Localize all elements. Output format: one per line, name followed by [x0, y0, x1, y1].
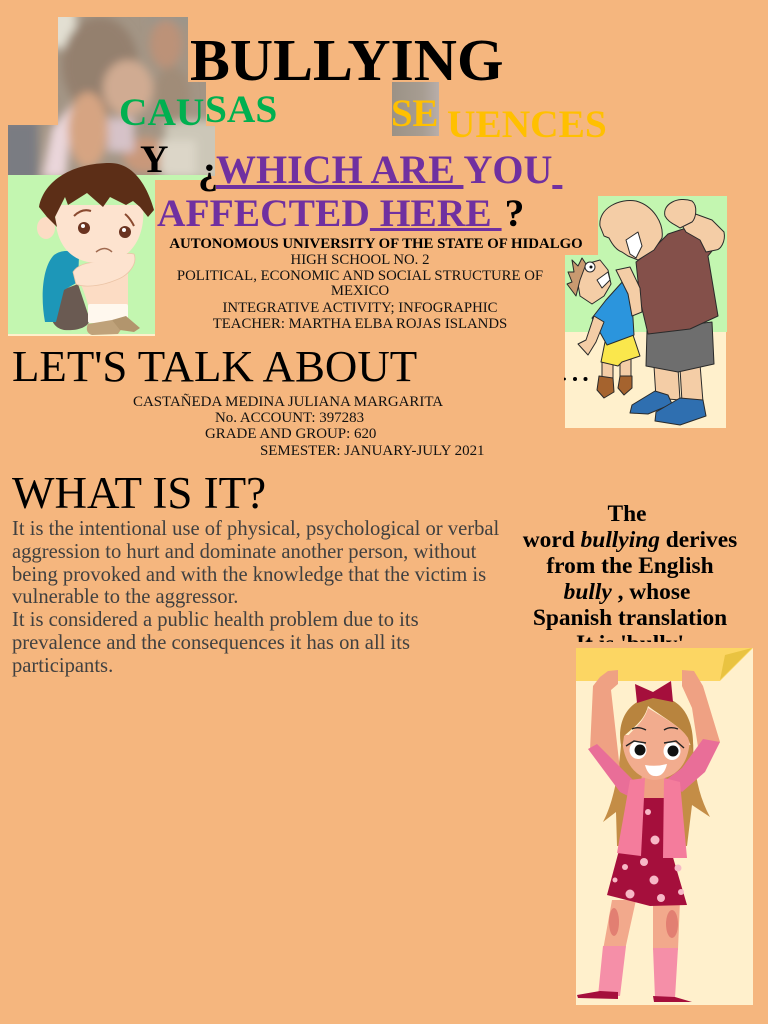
boy shorts: [52, 284, 90, 330]
bully raised arm: [680, 212, 724, 252]
text block: word origin: [522, 502, 737, 642]
text block: student information: SEMESTER: JANUARY-JULY 2021: [260, 442, 485, 458]
text block: definition of bullying: aggression to hurt and dominate another person, without: [12, 540, 476, 562]
text block: definition of bullying: vulnerable to the aggressor.: [12, 586, 238, 608]
heading: consequences: UENCES: [447, 102, 607, 146]
connector word: Y: Y: [140, 136, 168, 180]
text block: school information: [169, 236, 583, 332]
text block: student information: No. ACCOUNT: 397283: [215, 410, 364, 426]
image: smiling girl holding up a yellow banner: [576, 648, 753, 1005]
small boy shorts: [601, 335, 640, 366]
heading: which are you affected here: [157, 147, 562, 234]
text block: definition of bullying: prevalence and the consequences it has on all its: [12, 632, 410, 654]
small boy arm: [578, 316, 604, 355]
heading: causes: [119, 86, 277, 134]
text block: definition of bullying: It is considered a public health problem due to its: [12, 609, 419, 631]
yellow banner: [576, 648, 753, 681]
bully fist: [665, 199, 696, 228]
heading: which are you affected here: ¿: [198, 147, 218, 192]
text block: school information: POLITICAL, ECONOMIC AND SOCIAL STRUCTURE OF: [177, 268, 543, 284]
bully head: [600, 200, 662, 260]
bully shorts: [646, 322, 714, 372]
heading: which are you affected here: AFFECTED HERE ?: [157, 190, 524, 234]
small boy spiky hair: [567, 258, 586, 296]
girl bow: [635, 681, 673, 703]
bully shirt: [636, 224, 718, 334]
text block: definition of bullying: It is the intentional use of physical, psychological or verbal: [12, 518, 499, 540]
heading: causes: CAU: [119, 90, 204, 134]
girl sleeves: [588, 744, 633, 798]
girl neck: [640, 772, 668, 798]
heading: what is it: WHAT IS IT?: [12, 468, 266, 518]
bully legs: [654, 364, 703, 402]
text block: school information: TEACHER: MARTHA ELBA ROJAS ISLANDS: [213, 316, 507, 332]
boy hair: [39, 163, 154, 227]
girl hair top: [620, 697, 693, 752]
small boy shirt: [592, 280, 634, 345]
bully grabbing arm: [616, 267, 642, 316]
title: BULLYING: [190, 26, 504, 92]
text block: student information: CASTAÑEDA MEDINA JULIANA MARGARITA: [133, 394, 443, 410]
girl dress: [607, 785, 687, 906]
boy legs: [80, 262, 128, 314]
text block: word origin: from the English: [546, 552, 714, 578]
girl smile: [645, 764, 667, 776]
text block: definition of bullying: participants.: [12, 655, 113, 677]
text block: word origin: bully , whose: [564, 578, 690, 604]
heading: causes: SAS: [205, 86, 277, 130]
girl face skin under fringe: [626, 708, 688, 738]
text block: student information: GRADE AND GROUP: 620: [205, 426, 376, 442]
girl boots: [598, 946, 678, 998]
girl eyes: [630, 741, 646, 759]
image: sad boy sitting and hugging his knees: [8, 163, 207, 336]
small boy head: [576, 260, 611, 304]
boy arms: [73, 253, 135, 286]
text block: definition of bullying: being provoked and with the knowledge that the victim is: [12, 564, 486, 586]
text block: student information: [133, 394, 485, 458]
text block: word origin: Spanish translation: [533, 604, 727, 630]
text block: school information: INTEGRATIVE ACTIVITY; INFOGRAPHIC: [222, 300, 498, 316]
text block: school information: HIGH SCHOOL NO. 2: [291, 252, 429, 268]
girl jacket: [617, 778, 645, 856]
text block: school information: MEXICO: [331, 283, 389, 299]
text block: school information: AUTONOMOUS UNIVERSITY OF THE STATE OF HIDALGO: [169, 236, 583, 252]
small boy shoes: [597, 376, 632, 398]
boy shoes: [87, 320, 122, 335]
small boy legs: [602, 358, 631, 380]
girl raised arms: [590, 670, 620, 770]
heading: which are you affected here: WHICH ARE YOU: [216, 147, 552, 192]
image: big bully grabbing a small boy by the shirt: [565, 196, 727, 428]
girl head: [622, 735, 690, 780]
image: blurred photo of a girl being whispered to: [8, 17, 215, 176]
decorative ellipsis beside the heading: [564, 377, 588, 381]
girl legs: [603, 900, 680, 950]
boy eyes: [78, 222, 90, 234]
text block: definition of bullying: [12, 518, 499, 677]
heading: let's talk about: LET'S TALK ABOUT: [12, 341, 417, 391]
boy ear: [37, 217, 55, 239]
boy face: [55, 205, 143, 263]
text block: word origin: word bullying derives: [523, 526, 737, 552]
girl long hair back: [603, 745, 710, 846]
bully shoes: [630, 391, 672, 414]
bully teeth: [626, 232, 642, 258]
boy shirt: [43, 251, 79, 322]
